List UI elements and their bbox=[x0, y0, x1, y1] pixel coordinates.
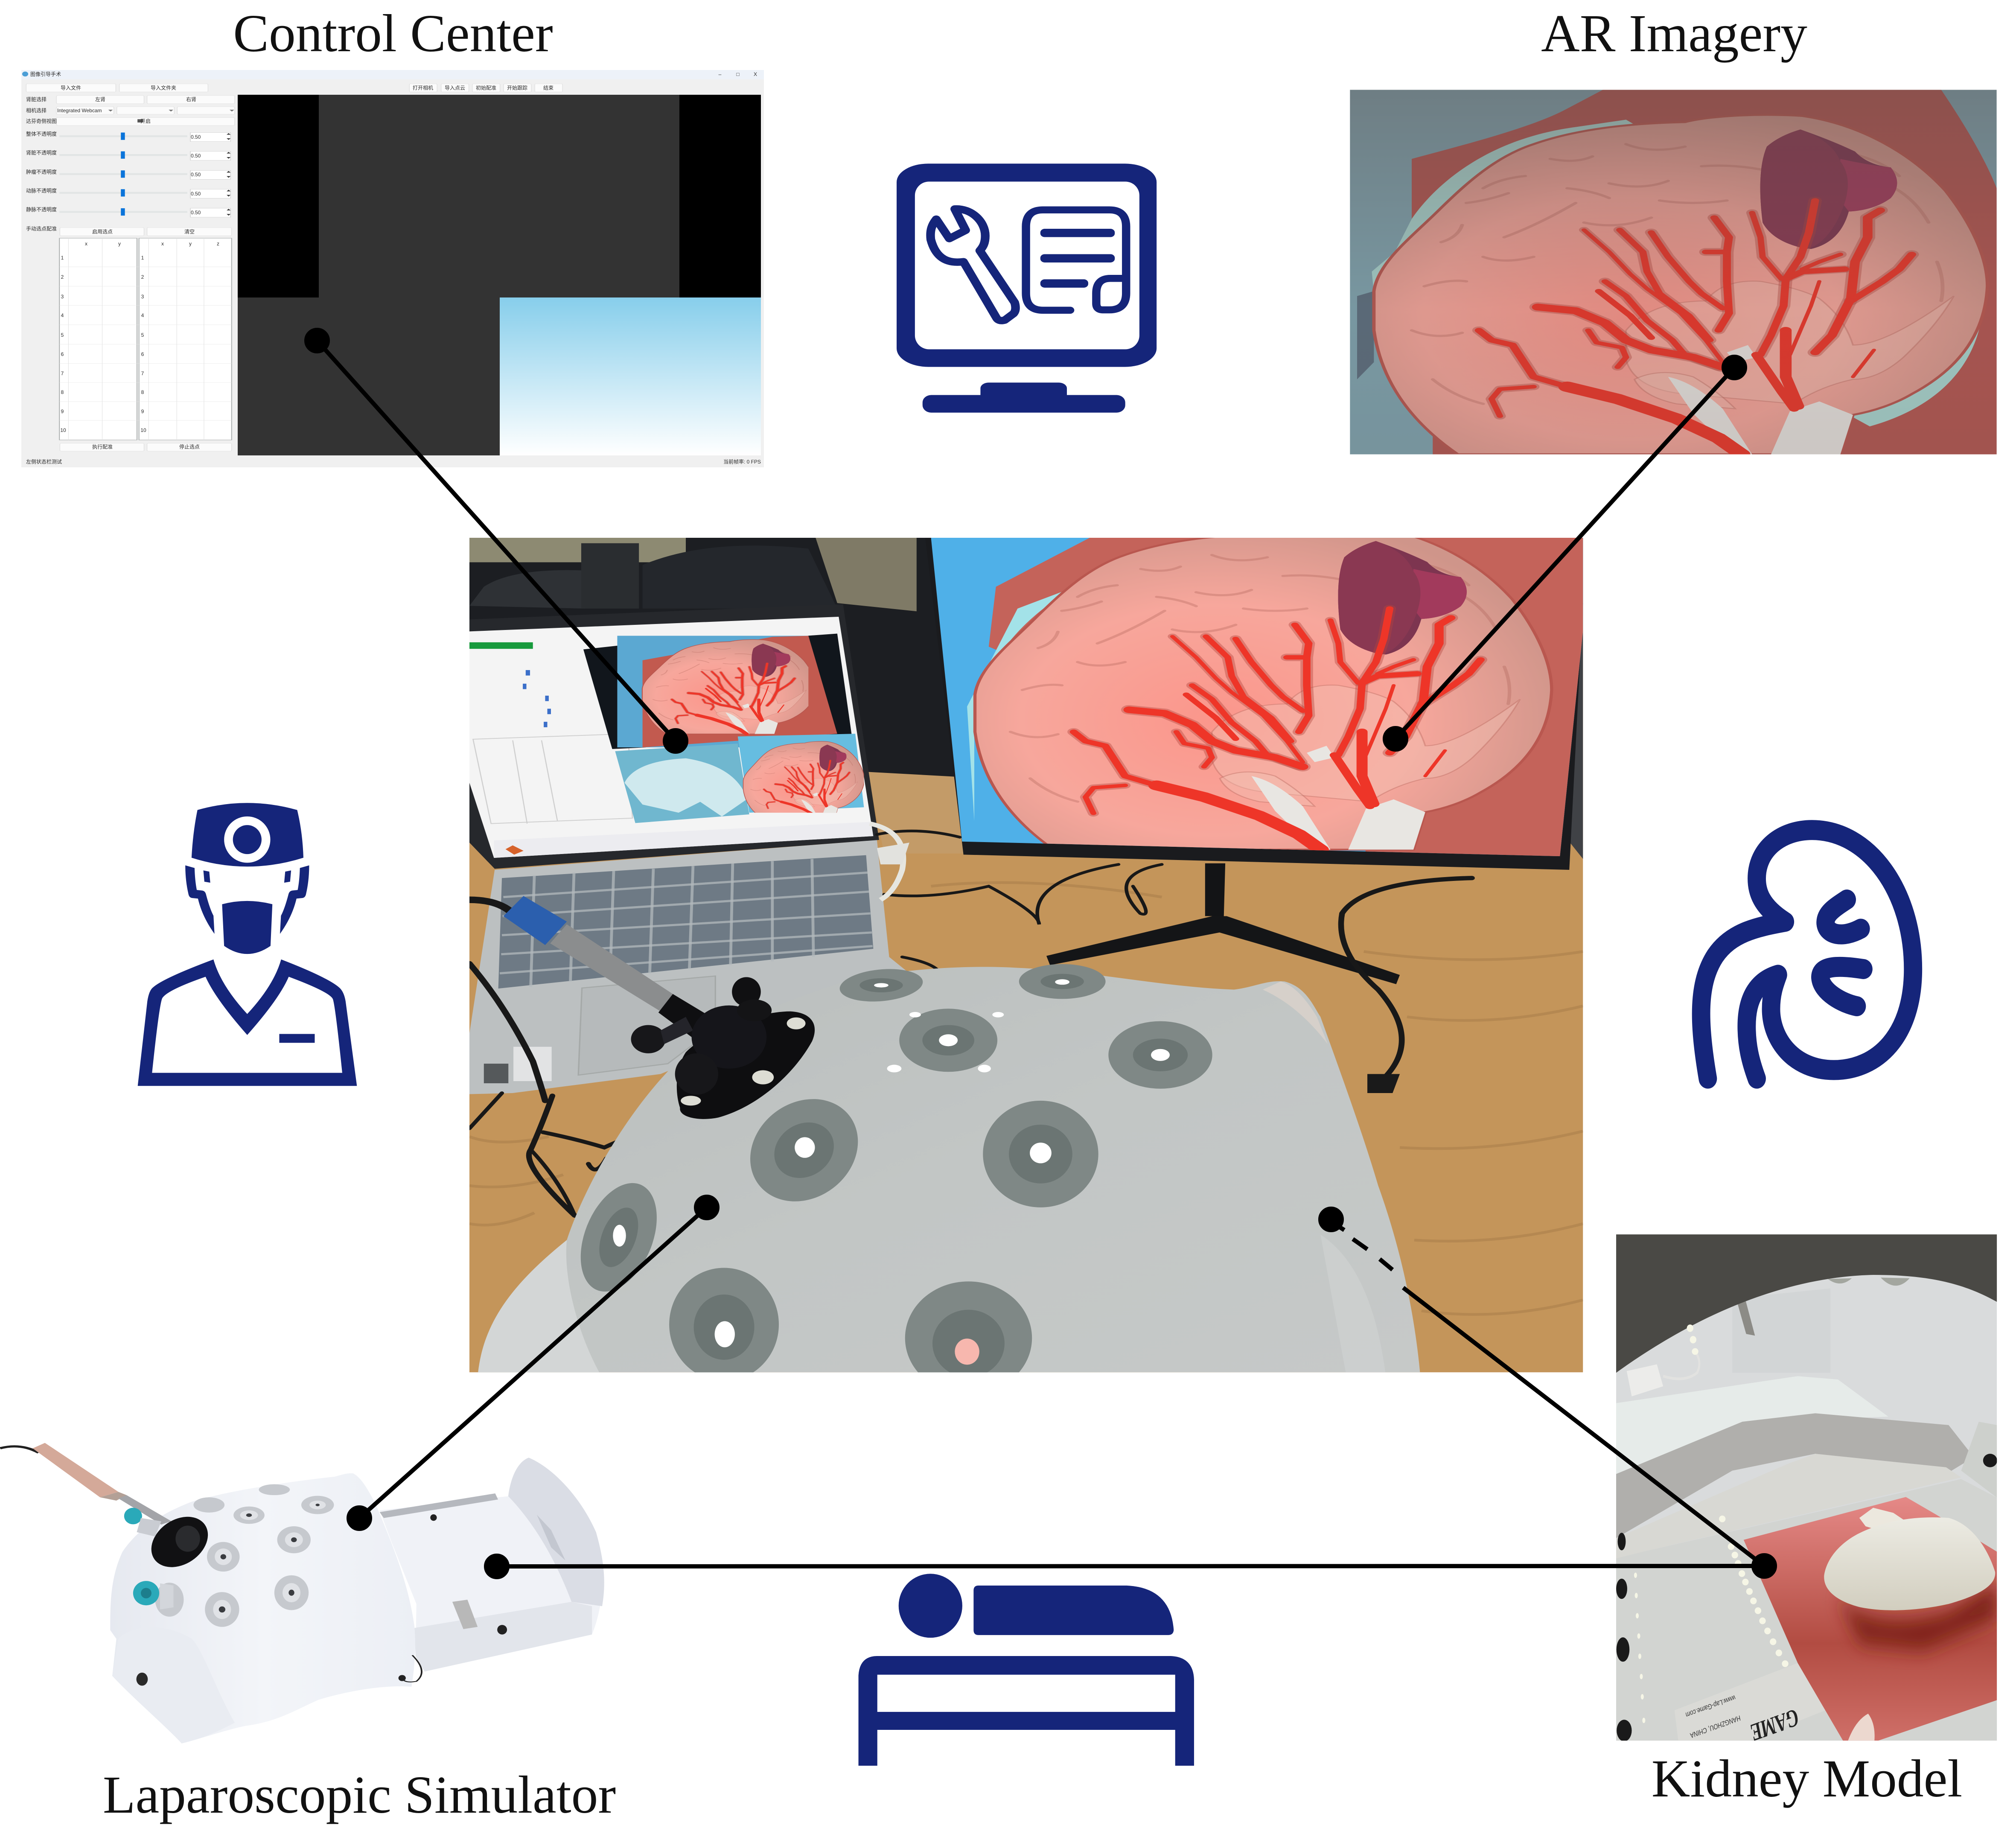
interface text: 结束 bbox=[543, 85, 554, 91]
connector: simulator to central photo bbox=[349, 1197, 717, 1529]
interface text: 动脉不透明度 bbox=[26, 187, 57, 194]
box interior bbox=[1616, 1234, 1997, 1741]
interface text: 4 bbox=[61, 312, 64, 318]
panel: central photo of laptop, monitor and simulator bbox=[469, 527, 1583, 1395]
interface text: 1 bbox=[141, 255, 144, 261]
interface text: 手动选点配准 bbox=[26, 226, 57, 232]
interface text: 整体不透明度 bbox=[26, 131, 57, 137]
video viewport bbox=[238, 95, 761, 455]
interface text: 3 bbox=[141, 294, 144, 300]
interface text: 初始配准 bbox=[476, 85, 496, 91]
LED strips bbox=[1634, 1324, 1789, 1723]
interface text: – bbox=[719, 71, 722, 77]
panel: AR imagery render bbox=[1350, 90, 1997, 454]
interface text: x bbox=[85, 241, 87, 247]
interface text: 0.50 bbox=[191, 191, 201, 197]
white kidney model bbox=[1824, 1508, 1995, 1610]
connector: kidney model to inside of simulator, dashed where hidden bbox=[1320, 1209, 1764, 1566]
interface text: 当前帧率: 0 FPS bbox=[723, 458, 761, 465]
interface text: 0.50 bbox=[191, 210, 201, 216]
monitor screen with AR kidney bbox=[925, 527, 1583, 984]
title: Control Center: Control Center bbox=[233, 4, 553, 63]
icon: surgeon bbox=[138, 803, 357, 1086]
interface text: 10 bbox=[140, 427, 146, 433]
interface text: 0.50 bbox=[191, 153, 201, 159]
interface text: 4 bbox=[141, 312, 144, 318]
laptop mini kidney view bbox=[642, 640, 816, 734]
interface text: 停止选点 bbox=[179, 443, 200, 450]
interface text: 0.50 bbox=[191, 172, 201, 178]
connector: control center to laptop bbox=[306, 330, 686, 752]
interface text: 左侧状态栏测试 bbox=[26, 458, 62, 465]
interface text: 7 bbox=[61, 370, 64, 376]
silicone pad bbox=[1744, 1497, 1997, 1741]
interface text: 导入文件 bbox=[61, 85, 81, 91]
interface text: 导入文件夹 bbox=[151, 85, 176, 91]
interface text: x bbox=[161, 241, 164, 247]
title: Laparoscopic Simulator: Laparoscopic Simulator bbox=[103, 1765, 616, 1825]
simulator shell bbox=[110, 1473, 422, 1744]
interface text: 导入点云 bbox=[445, 85, 465, 91]
interface text: 清空 bbox=[184, 229, 195, 235]
interface text: 8 bbox=[61, 389, 64, 395]
metal label plate: GAME bbox=[1748, 1703, 1801, 1747]
panel: kidney model photo bbox=[1616, 1234, 1997, 1747]
metal label plate bbox=[1675, 1663, 1825, 1747]
interface text: z bbox=[217, 241, 219, 247]
interface text: y bbox=[118, 241, 121, 247]
cables bbox=[469, 831, 1472, 1216]
interface text: 2 bbox=[61, 274, 64, 280]
table and room bbox=[469, 538, 1583, 1372]
interface text: 7 bbox=[141, 370, 144, 376]
simulator tray bbox=[380, 1458, 604, 1671]
interface text: X bbox=[754, 71, 757, 77]
interface text: 图像引导手术 bbox=[30, 71, 61, 77]
simulator ports bbox=[155, 1484, 334, 1627]
instrument and port bbox=[503, 896, 815, 1119]
interface text: 右肾 bbox=[186, 96, 196, 102]
icon: kidney bbox=[1701, 830, 1913, 1079]
interface text: 肿瘤不透明度 bbox=[26, 169, 57, 175]
interface text: 左肾 bbox=[95, 96, 105, 102]
laptop bbox=[469, 604, 909, 1094]
interface text: 2 bbox=[141, 274, 144, 280]
metal label plate: www.Lap-Game.com bbox=[1685, 1693, 1736, 1719]
keyboard bbox=[498, 855, 873, 988]
window controls and form widgets bbox=[22, 72, 562, 451]
kidney render bbox=[1374, 115, 1987, 454]
interface text: 开始跟踪 bbox=[507, 85, 527, 91]
interface text: 开启 bbox=[140, 118, 151, 124]
interface text: 8 bbox=[141, 389, 144, 395]
interface text: y bbox=[189, 241, 192, 247]
interface text: 肾脏不透明度 bbox=[26, 149, 57, 156]
simulator instrument bbox=[0, 1443, 217, 1609]
panel: control center software window bbox=[21, 70, 764, 467]
dark arch bbox=[1616, 1234, 1997, 1373]
interface text: 达芬奇侧视图 bbox=[26, 118, 57, 124]
metal label plate: HANGZHOU, CHINA bbox=[1689, 1714, 1741, 1740]
interface text: 5 bbox=[61, 332, 64, 338]
interface text: 打开相机 bbox=[413, 85, 433, 91]
interface text: 6 bbox=[61, 351, 64, 357]
interface text: Integrated Webcam bbox=[57, 108, 102, 114]
coordinate tables bbox=[59, 238, 232, 440]
interface text: 静脉不透明度 bbox=[26, 206, 57, 213]
simulator trocar rings bbox=[567, 964, 1212, 1395]
interface text: 启用选点 bbox=[92, 229, 113, 235]
interface text: 9 bbox=[141, 408, 144, 414]
interface text: 0.50 bbox=[191, 134, 201, 140]
interface text: 6 bbox=[141, 351, 144, 357]
connector: simulator tray to kidney model bbox=[486, 1555, 1775, 1577]
icon: monitor with wrench and document bbox=[897, 163, 1157, 413]
interface text: 10 bbox=[60, 427, 66, 433]
interface text: 肾脏选择 bbox=[26, 96, 47, 102]
title: Kidney Model: Kidney Model bbox=[1652, 1749, 1962, 1808]
icon: patient on bed bbox=[859, 1574, 1194, 1766]
interface text: 9 bbox=[61, 408, 64, 414]
panel: laparoscopic simulator product photo bbox=[0, 1443, 604, 1744]
title: AR Imagery: AR Imagery bbox=[1541, 4, 1807, 63]
interface text bbox=[26, 71, 761, 465]
interface text: 执行配准 bbox=[92, 444, 113, 450]
interface text: 相机选择 bbox=[26, 108, 47, 114]
touchpad bbox=[578, 976, 715, 1075]
interface text: 1 bbox=[61, 255, 64, 261]
connector: AR imagery to monitor bbox=[1385, 357, 1745, 749]
interface text: 3 bbox=[61, 294, 64, 300]
interface text: □ bbox=[736, 71, 740, 77]
simulator shell bbox=[478, 967, 1420, 1372]
interface text: 5 bbox=[141, 332, 144, 338]
